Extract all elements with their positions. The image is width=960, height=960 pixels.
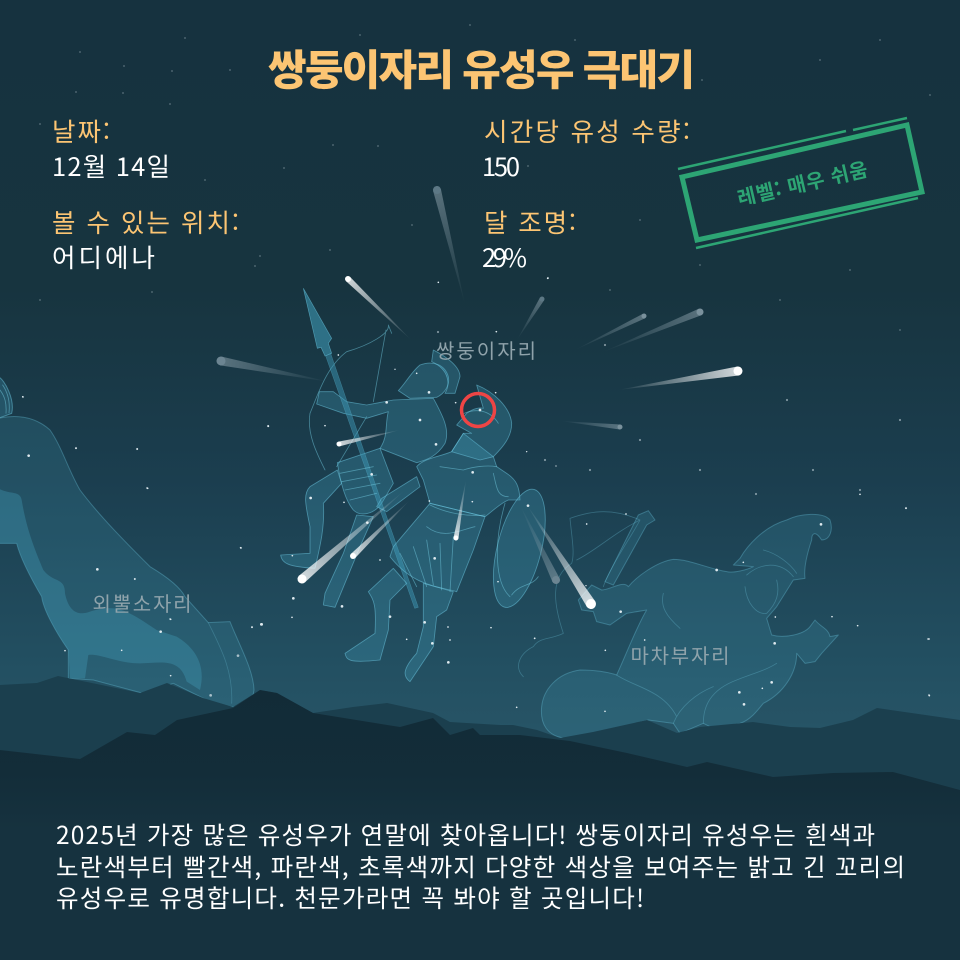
constellation: 쌍둥이자리 figures <box>260 277 557 682</box>
mountains: back ridge <box>0 676 960 800</box>
info: moonlight <box>482 203 576 275</box>
meteor <box>344 275 413 342</box>
foreground ground <box>0 830 960 960</box>
meteor <box>336 427 401 447</box>
stamp text: 레벨: 매우 쉬움 <box>734 153 870 212</box>
constellation label: 마차부자리: 마차부자리 <box>630 640 730 669</box>
info: hourly meteors: 150 <box>482 147 520 184</box>
info: moonlight: 29% <box>482 238 527 275</box>
front warrior <box>345 385 520 682</box>
info: date <box>52 112 170 184</box>
meteors <box>216 185 743 611</box>
info: moonlight: 달 조명: <box>484 203 576 240</box>
title: 쌍둥이자리 유성우 극대기 <box>268 37 695 98</box>
meteor <box>560 419 623 430</box>
info: date: 날짜: <box>52 112 110 149</box>
info: visible location <box>52 203 239 275</box>
meteor <box>602 307 705 355</box>
bow and string <box>309 325 392 470</box>
rear warrior <box>281 350 460 607</box>
meteor <box>216 356 331 386</box>
constellation label: 쌍둥이자리: 쌍둥이자리 <box>436 335 536 364</box>
radiant marker: red circle <box>462 394 494 426</box>
info: hourly meteors: 시간당 유성 수량: <box>484 112 690 149</box>
meteor <box>618 366 743 394</box>
info: date: 12월 14일 <box>52 147 170 184</box>
meteor <box>349 498 412 560</box>
description paragraph: 2025년 가장 많은 유성우가 연말에 찾아옵니다! 쌍둥이자리 유성우는 흰색과 <box>56 817 875 852</box>
meteor <box>453 479 469 541</box>
constellation label: 외뿔소자리: 외뿔소자리 <box>92 588 192 617</box>
meteor <box>574 313 647 352</box>
info: hourly meteors <box>482 112 690 184</box>
meteor <box>515 296 545 341</box>
meteor <box>296 487 408 585</box>
description paragraph: 노란색부터 빨간색, 파란색, 초록색까지 다양한 색상을 보여주는 밝고 긴 꼬리의 <box>56 849 905 884</box>
mountains: front ridge <box>0 690 960 830</box>
spear <box>303 288 332 356</box>
description paragraph: 유성우로 유명합니다. 천문가라면 꼭 봐야 할 곳입니다! <box>56 880 644 915</box>
constellation: 외뿔소자리 figure <box>0 377 269 707</box>
constellation: 마차부자리 figure <box>516 493 930 738</box>
stamp: difficulty level <box>678 118 922 248</box>
star field <box>22 24 931 696</box>
meteor <box>517 503 561 585</box>
arm crossing <box>377 477 420 512</box>
info: visible location: 볼 수 있는 위치: <box>52 203 239 240</box>
meteor <box>432 185 469 306</box>
description paragraph <box>56 817 905 915</box>
shield <box>483 484 555 613</box>
meteor <box>523 502 598 611</box>
info: visible location: 어디에나 <box>52 238 155 275</box>
